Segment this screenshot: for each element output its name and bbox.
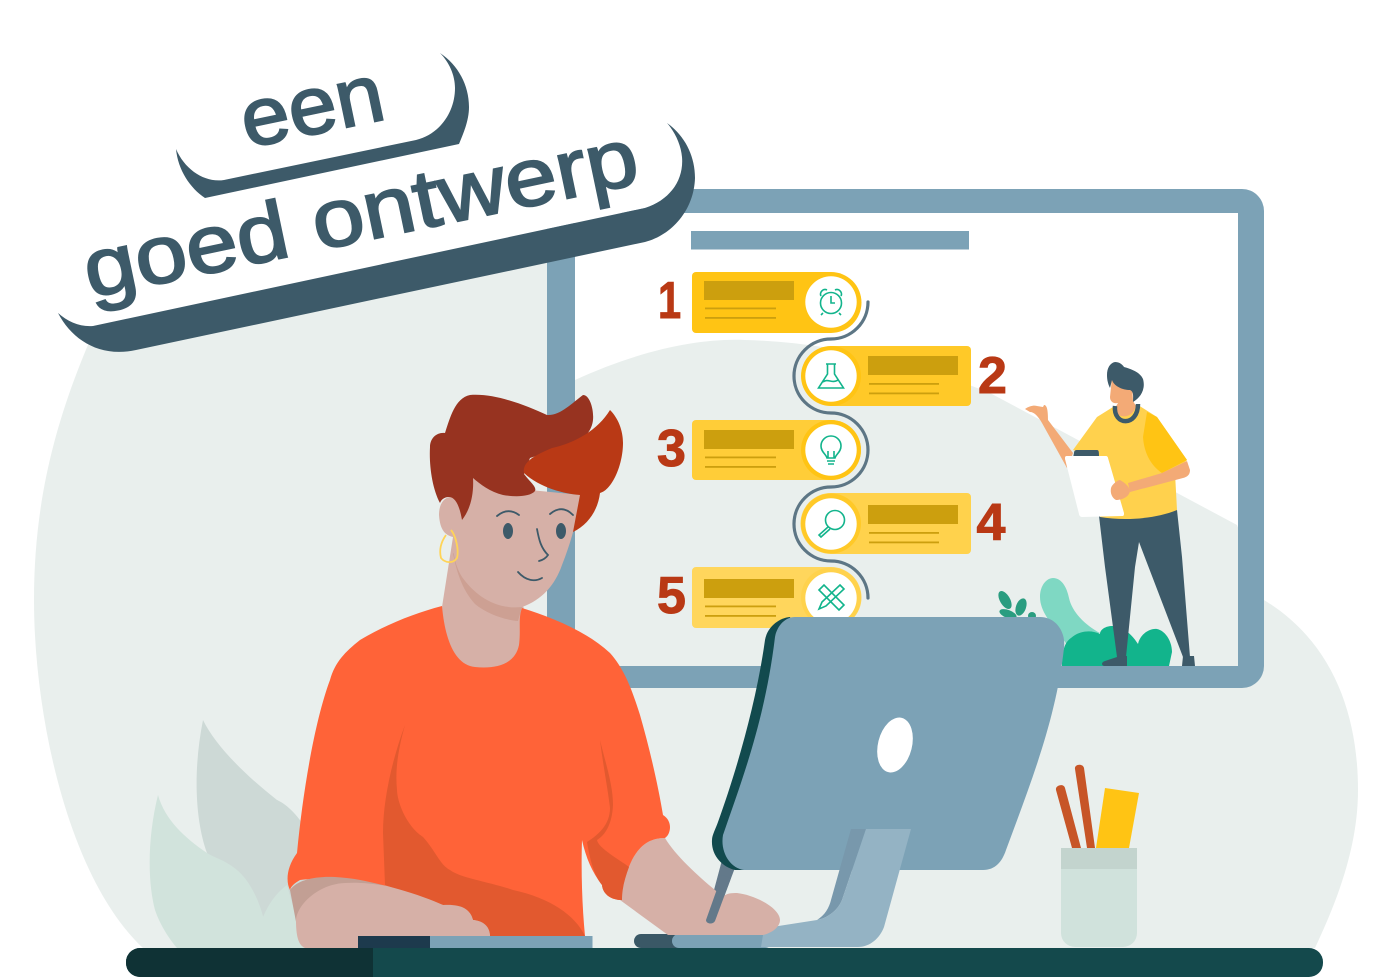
presenter figure — [1025, 362, 1195, 666]
step card 5 — [657, 567, 861, 628]
step card 1 — [658, 271, 861, 333]
number 5: 5 — [657, 567, 686, 625]
shirt shadow fold — [383, 725, 585, 936]
tablet on desk — [358, 936, 592, 948]
hand — [1111, 480, 1130, 500]
neck shadow — [453, 553, 522, 621]
winding connector line — [794, 302, 868, 598]
monitor back — [722, 617, 1064, 870]
number 1: 1 — [658, 271, 681, 329]
earring — [440, 530, 458, 562]
step card 3 — [657, 420, 861, 480]
title banner: goed ontwerp: goed ontwerp — [75, 111, 646, 316]
presentation screen frame — [547, 189, 1264, 688]
sleeve shadow fold — [587, 740, 629, 900]
background blob — [34, 250, 1358, 948]
monitor edge — [712, 617, 800, 870]
raised arm — [1025, 405, 1073, 468]
stylus pen — [706, 860, 736, 924]
plant: pale leaves bottom left — [150, 720, 320, 948]
hair — [1107, 362, 1144, 402]
yellow t-shirt — [1073, 405, 1187, 519]
icon: alarm clock — [820, 290, 842, 315]
icon: light bulb — [821, 436, 841, 464]
collar — [1115, 404, 1138, 421]
keyboard — [634, 934, 772, 948]
pen over hand — [706, 875, 731, 924]
pencil cup — [1056, 765, 1139, 947]
number 3: 3 — [657, 420, 686, 478]
apple-style logo spot — [872, 714, 918, 776]
plants at presenter's feet — [1040, 578, 1172, 666]
small plant behind monitor — [996, 589, 1036, 621]
neck and face — [1110, 378, 1136, 416]
icon: crossed ruler and pencil — [819, 585, 844, 610]
desktop computer — [634, 617, 1064, 948]
face — [439, 470, 581, 607]
title banner: een: een — [232, 47, 392, 166]
woman's neck — [440, 537, 530, 680]
lower arm — [1128, 461, 1190, 492]
screen title bar — [691, 231, 969, 250]
dark hair — [430, 395, 593, 520]
number 4: 4 — [976, 494, 1006, 552]
icon: magnifying glass — [819, 510, 844, 537]
desk — [126, 948, 1323, 977]
woman at desk — [288, 395, 670, 948]
t-shirt sleeve — [1143, 412, 1187, 473]
title banner: goed ontwerp — [58, 100, 695, 352]
orange shirt — [288, 606, 670, 936]
facial features — [497, 509, 573, 580]
step card 2 — [801, 346, 1007, 406]
title banner: een — [176, 47, 469, 198]
icon: flask — [818, 364, 844, 388]
shoes — [1102, 656, 1195, 666]
clipboard — [1065, 450, 1124, 517]
trousers — [1099, 510, 1190, 657]
bright hair quiff — [524, 410, 623, 532]
step card 4 — [800, 493, 1006, 554]
left forearm — [290, 877, 490, 948]
monitor stand — [761, 829, 911, 947]
right hand on tablet — [620, 838, 780, 935]
number 2: 2 — [978, 347, 1007, 405]
